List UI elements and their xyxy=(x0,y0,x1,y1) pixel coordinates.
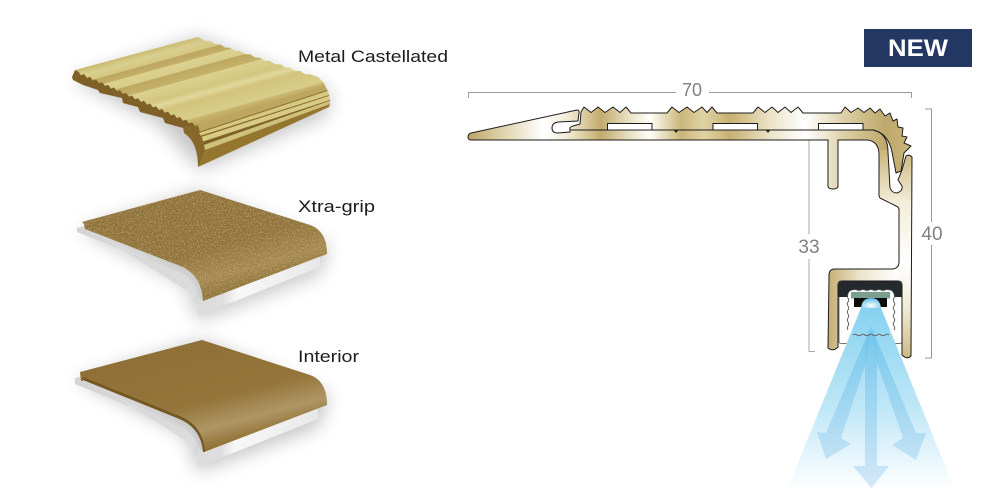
arrow: right xyxy=(871,326,926,460)
smooth surface xyxy=(80,340,327,452)
badge: NEW: NEW xyxy=(888,35,948,62)
grey carrier xyxy=(75,376,318,467)
LED module xyxy=(847,289,895,336)
textured surface xyxy=(82,190,327,301)
underside with feet xyxy=(72,70,198,135)
light beam xyxy=(787,308,955,490)
badge: NEW xyxy=(864,29,972,67)
arrow: left xyxy=(817,326,871,459)
dimension: height 40 xyxy=(921,109,943,358)
black LED block xyxy=(854,298,887,307)
white carrier xyxy=(77,226,320,316)
aluminium profile xyxy=(468,107,912,358)
product: Metal Castellated nosing xyxy=(72,37,330,170)
dimension: width 70: 70 xyxy=(682,80,702,100)
green cover bar xyxy=(851,292,890,298)
front ribs xyxy=(198,85,330,167)
product: Interior nosing xyxy=(75,340,330,472)
label: Metal Castellated: Metal Castellated xyxy=(298,47,448,66)
label: Interior: Interior xyxy=(298,347,359,366)
profile cavities xyxy=(608,124,863,130)
profile notches xyxy=(674,130,770,133)
dimension: height 33: 33 xyxy=(798,237,820,258)
nose xyxy=(183,125,206,167)
toothed top cap xyxy=(570,107,911,173)
dimension: height 33 xyxy=(798,140,820,352)
arrow: centre xyxy=(853,330,889,488)
LED dome xyxy=(861,298,881,308)
dimension: height 40: 40 xyxy=(921,224,943,245)
dimension: width 70 xyxy=(468,80,912,100)
ribbed top surface xyxy=(75,37,326,132)
wavy lens outline xyxy=(847,289,895,336)
dark lower edge xyxy=(83,377,205,452)
label: Xtra-grip: Xtra-grip xyxy=(298,197,375,216)
LED channel interior xyxy=(838,282,902,344)
product: Xtra-grip nosing xyxy=(77,190,330,322)
